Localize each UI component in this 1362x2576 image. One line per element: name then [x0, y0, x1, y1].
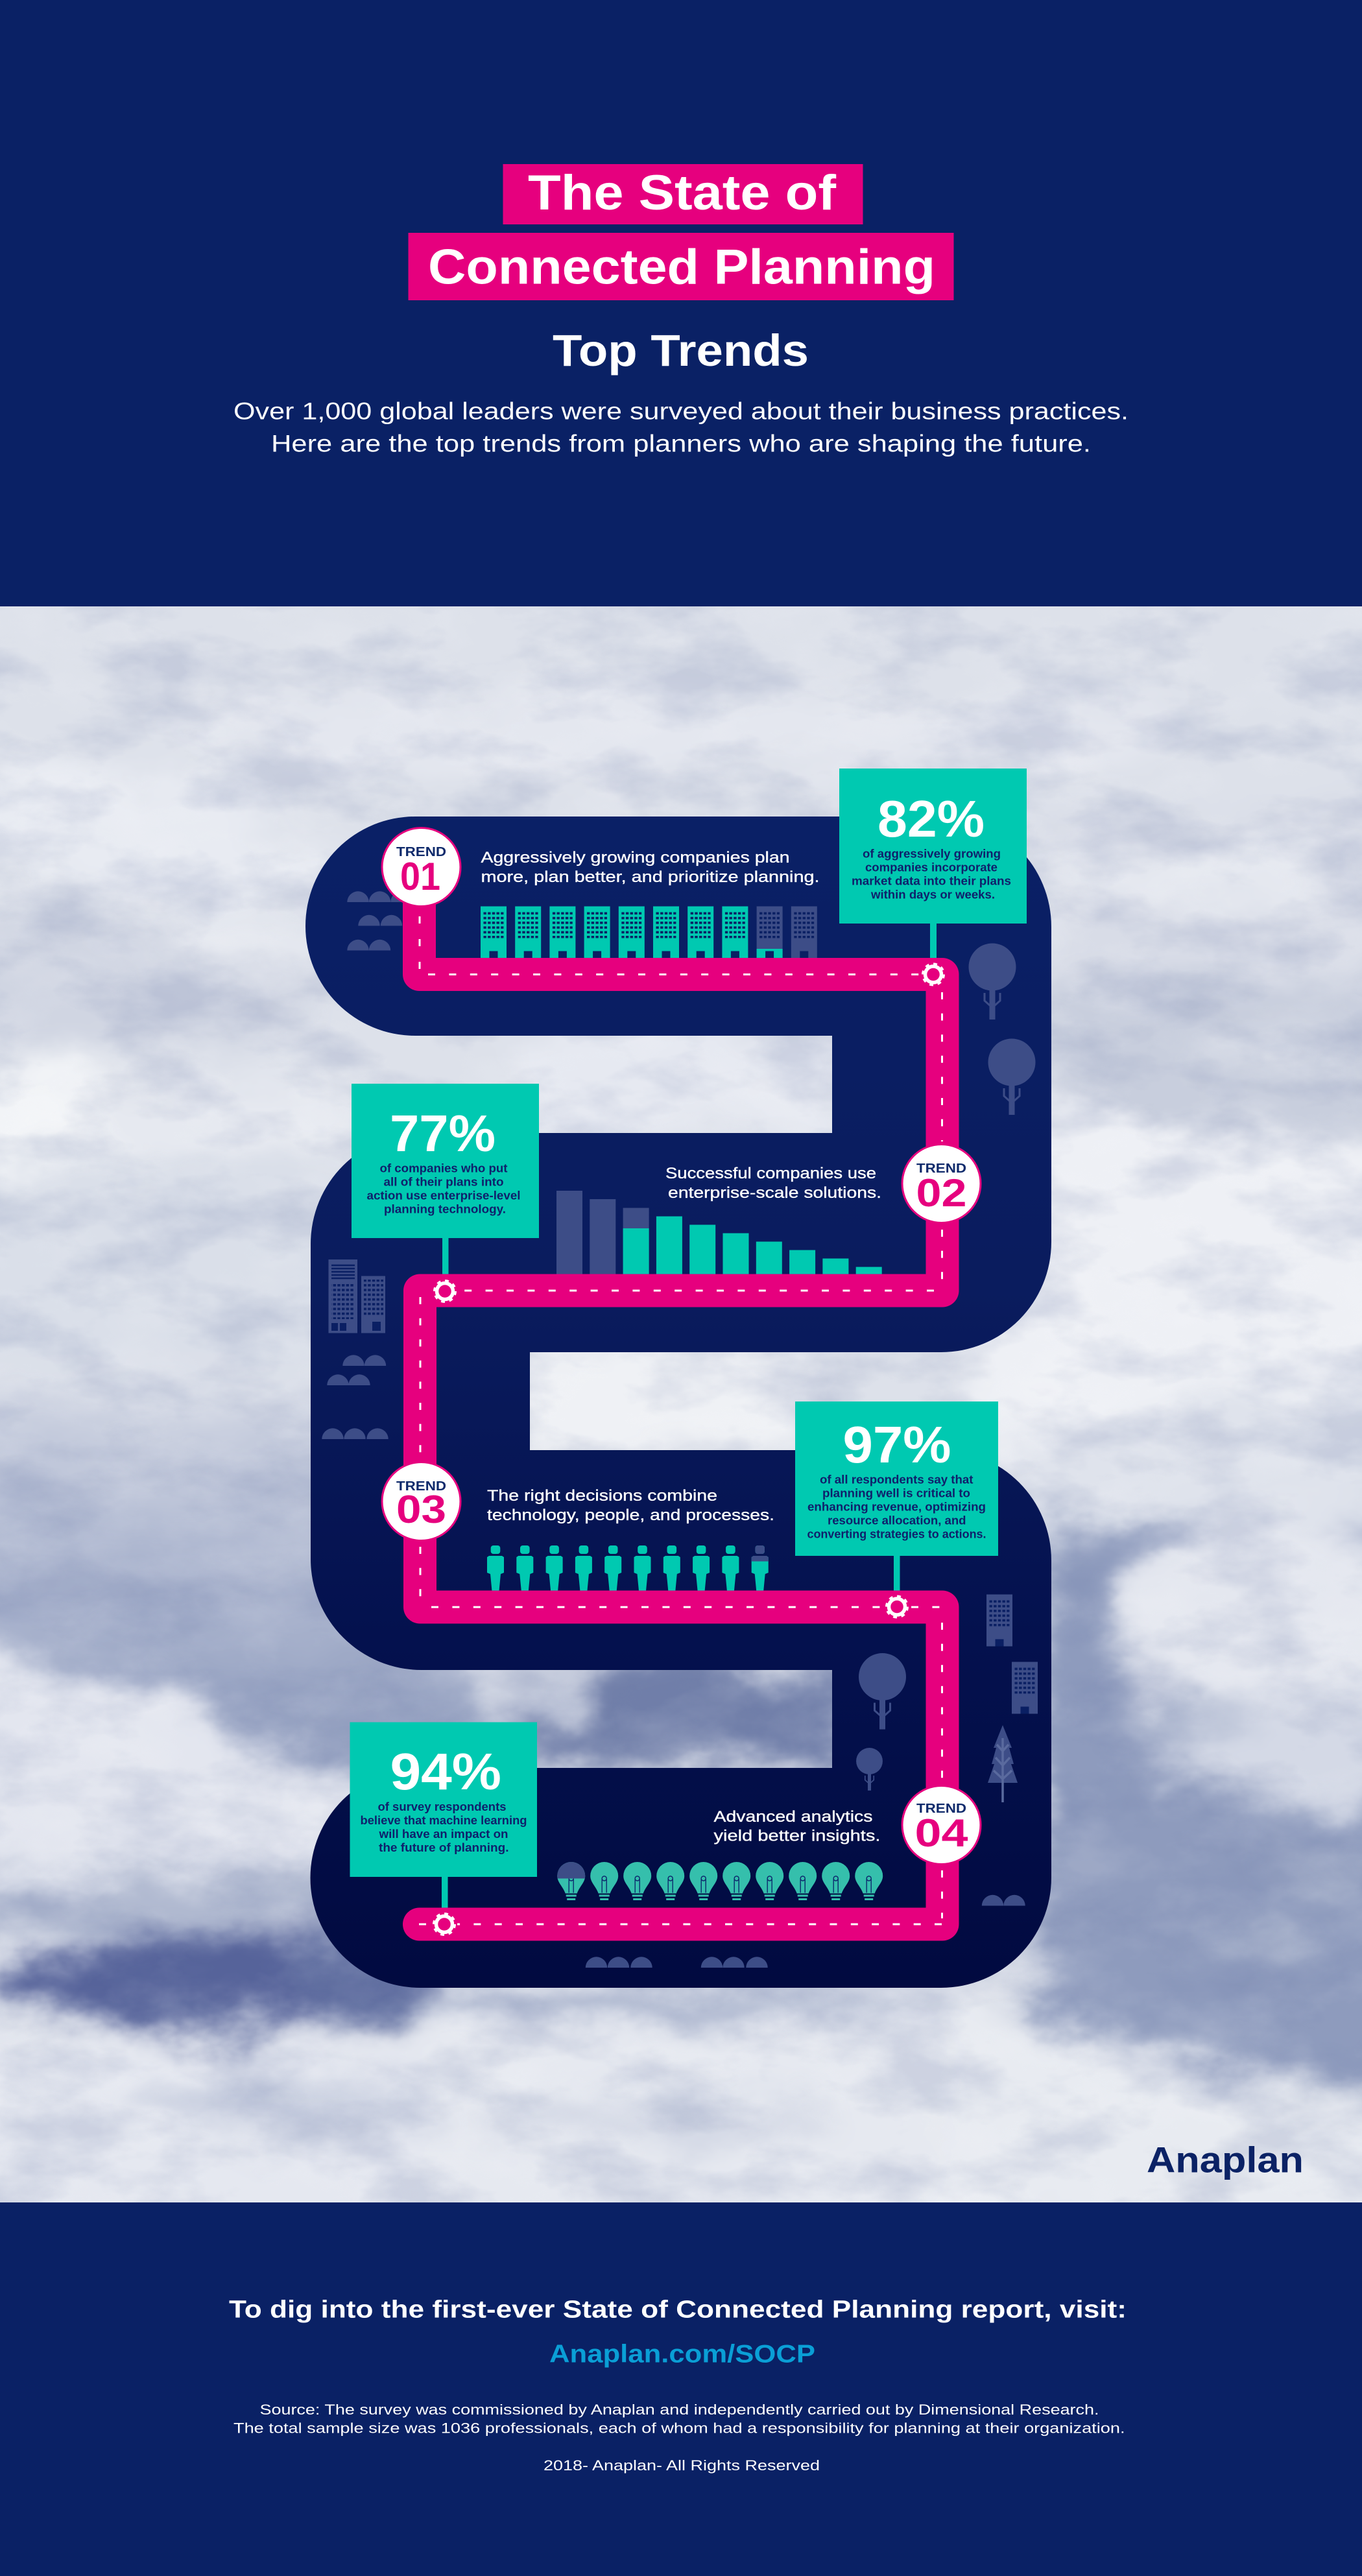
background icons: grey buildings right [986, 1594, 1038, 1713]
stat box: 94%: of survey respondents [377, 1800, 506, 1813]
call to action link: Anaplan.com/SOCP [549, 2340, 815, 2368]
title line 2: Connected Planning [428, 240, 935, 294]
statement: trend 01: more, plan better, and prioritize planning. [481, 868, 820, 886]
stat box: 94% [350, 1723, 537, 1877]
stat box: 82% [839, 769, 1027, 924]
subtitle: Top Trends: Top Trends [553, 326, 809, 376]
stat box: 97%: converting strategies to actions. [807, 1528, 986, 1541]
badge: trend 02: TREND [916, 1162, 966, 1176]
intro paragraph: Here are the top trends from planners who are shaping the future. [271, 431, 1091, 457]
badge: trend 04 [902, 1786, 981, 1864]
stat box: 97%: enhancing revenue, optimizing [807, 1501, 986, 1514]
stat box: 94%: will have an impact on [378, 1828, 508, 1841]
title highlight: Connected Planning [409, 233, 953, 300]
stat box: 77%: 77% [390, 1104, 496, 1162]
call to action heading: To dig into the first-ever State of Connected Planning report, visit: [229, 2296, 1127, 2323]
stat box: 97%: resource allocation, and [828, 1514, 966, 1527]
stat box: 97%: of all respondents say that [820, 1473, 973, 1486]
chart: descending bars [556, 1191, 882, 1275]
statement: trend 03: The right decisions combine [487, 1487, 717, 1505]
stat box: 77%: action use enterprise-level [367, 1189, 520, 1202]
background icons: round trees [856, 943, 1035, 1791]
stat box: 82%: companies incorporate [865, 861, 998, 874]
statement: trend 03: technology, people, and processes. [487, 1507, 774, 1524]
gear icon: trend 1 [924, 964, 943, 984]
source note: The total sample size was 1036 professionals, each of whom had a responsibility for planning at their organization. [233, 2420, 1125, 2436]
badge: trend 02: 02 [916, 1171, 966, 1215]
statement: trend 04: yield better insights. [713, 1828, 881, 1844]
gear icon: trend 3 [887, 1597, 907, 1617]
statement: trend 04: Advanced analytics [713, 1808, 873, 1826]
stat box: 77%: planning technology. [384, 1202, 506, 1215]
badge: trend 01 [382, 828, 460, 907]
stat box: 82%: market data into their plans [852, 874, 1011, 887]
badge: trend 03: TREND [396, 1479, 446, 1494]
badge: trend 04: TREND [916, 1802, 966, 1816]
statement: trend 03 [487, 1487, 774, 1524]
source note: Source: The survey was commissioned by Anaplan and independently carried out by Dimensional Research. [259, 2402, 1099, 2418]
badge: trend 01: TREND [396, 845, 446, 859]
cloud photo background [0, 606, 1362, 2202]
statement: trend 01: Aggressively growing companies plan [481, 849, 790, 866]
stat box: 82%: within days or weeks. [870, 888, 995, 901]
background icon: pine tree [988, 1725, 1018, 1802]
stat box: 77%: all of their plans into [384, 1175, 503, 1188]
stat box: 94%: 94% [390, 1743, 501, 1800]
title block [409, 164, 953, 300]
footer background panel [0, 2202, 1362, 2576]
statement: trend 02 [665, 1165, 881, 1202]
logo: Anaplan: Anaplan [1147, 2139, 1304, 2180]
statement: trend 02: Successful companies use [665, 1165, 876, 1182]
copyright line: 2018- Anaplan- All Rights Reserved [544, 2457, 820, 2474]
badge: trend 01: 01 [400, 855, 440, 898]
stat box: 94%: believe that machine learning [361, 1814, 527, 1827]
statement: trend 01 [481, 849, 820, 886]
badge: trend 04: 04 [914, 1811, 968, 1855]
source note [233, 2402, 1125, 2436]
intro paragraph: Over 1,000 global leaders were surveyed about their business practices. [233, 398, 1129, 424]
stat box: 97%: 97% [843, 1416, 951, 1473]
badge: trend 03 [382, 1462, 460, 1541]
background icons: grey buildings left [328, 1259, 385, 1333]
stat box: 82%: 82% [878, 790, 985, 848]
intro paragraph [233, 398, 1129, 457]
road centre dashes [419, 916, 942, 1924]
stat box: 97%: planning well is critical to [822, 1486, 970, 1499]
chart: people [487, 1545, 769, 1591]
stat box: 97% [795, 1401, 998, 1556]
gear icon: trend 2 [435, 1282, 455, 1301]
stat box: 94%: the future of planning. [379, 1841, 508, 1854]
statement: trend 04 [713, 1808, 881, 1844]
chart: light bulbs [557, 1862, 883, 1900]
title line 1: The State of [528, 165, 837, 221]
pink road [419, 895, 942, 1924]
title highlight: The State of [503, 164, 863, 224]
S-shaped dark route panel [305, 817, 1051, 1988]
header background panel [0, 0, 1362, 606]
stat box: 77% [352, 1084, 539, 1238]
badge: trend 03: 03 [396, 1488, 446, 1531]
gear icon: trend 4 [435, 1914, 454, 1934]
background icons: bushes [322, 891, 1025, 1968]
connector stems to stat boxes [442, 921, 937, 1910]
badge: trend 02 [902, 1144, 981, 1223]
statement: trend 02: enterprise-scale solutions. [668, 1184, 881, 1202]
stat box: 82%: of aggressively growing [863, 847, 1001, 860]
stat box: 77%: of companies who put [380, 1162, 507, 1175]
chart: buildings [481, 907, 817, 959]
